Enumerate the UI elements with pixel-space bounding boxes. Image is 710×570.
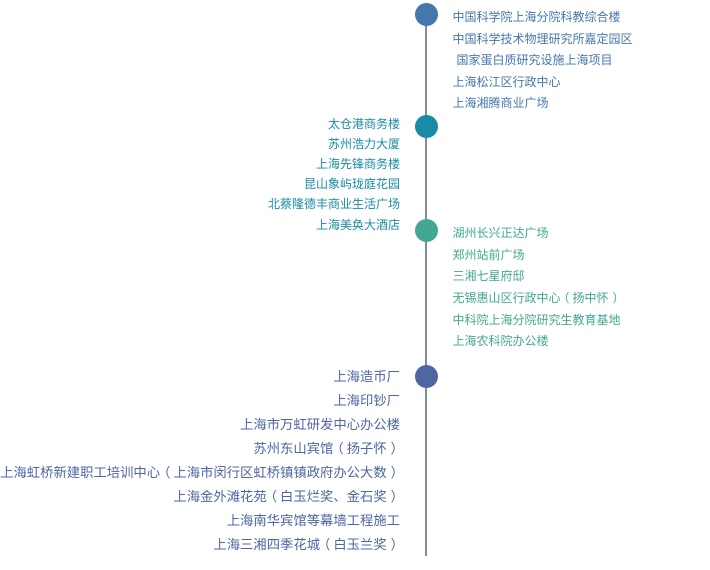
text group: indigo project list: 上海造币厂 xyxy=(333,369,400,384)
node: indigo xyxy=(415,365,438,388)
text group: indigo project list: 上海南华宾馆等幕墙工程施工 xyxy=(227,513,400,528)
text group: green project list: 中科院上海分院研究生教育基地 xyxy=(452,313,621,327)
text group: blue project list: 中国科学院上海分院科教综合楼 xyxy=(452,10,621,24)
text group: teal project list: 北蔡隆德丰商业生活广场 xyxy=(268,197,400,211)
text group: teal project list xyxy=(268,117,400,232)
node: teal xyxy=(415,115,438,138)
text group: teal project list: 昆山象屿珑庭花园 xyxy=(304,177,400,191)
text group: blue project list: 中国科学技术物理研究所嘉定园区 xyxy=(452,32,633,46)
text group: teal project list: 上海先锋商务楼 xyxy=(316,157,400,171)
text group: blue project list: 上海湘腾商业广场 xyxy=(452,96,549,110)
text group: green project list: 三湘七星府邸 xyxy=(452,269,525,283)
text group: indigo project list xyxy=(0,369,404,552)
text group: indigo project list: 上海金外滩花苑（白玉烂奖、金石奖 ） xyxy=(173,489,404,504)
timeline axis xyxy=(425,15,427,556)
text group: blue project list: 国家蛋白质研究设施上海项目 xyxy=(456,53,613,67)
text group: teal project list: 上海美奂大酒店 xyxy=(316,218,400,232)
text group: indigo project list: 上海虹桥新建职工培训中心（上海市闵行区虹桥镇镇政府办公大数 ） xyxy=(0,465,404,480)
text group: teal project list: 苏州浩力大厦 xyxy=(328,137,400,151)
text group: green project list: 湖州长兴正达广场 xyxy=(452,226,549,240)
text group: indigo project list: 苏州东山宾馆（扬子怀 ） xyxy=(253,441,404,456)
text group: blue project list: 上海松江区行政中心 xyxy=(452,75,561,89)
text group: teal project list: 太仓港商务楼 xyxy=(328,117,400,131)
node: green xyxy=(415,219,438,242)
text group: green project list: 上海农科院办公楼 xyxy=(452,334,549,348)
node: top blue xyxy=(415,3,438,26)
text group: indigo project list: 上海三湘四季花城（白玉兰奖 ） xyxy=(213,537,404,552)
text group: green project list xyxy=(452,226,625,348)
text group: indigo project list: 上海市万虹研发中心办公楼 xyxy=(240,417,400,432)
text group: green project list: 郑州站前广场 xyxy=(452,248,525,262)
text group: green project list: 无锡惠山区行政中心（扬中怀 ） xyxy=(452,291,625,305)
text group: indigo project list: 上海印钞厂 xyxy=(333,393,400,408)
text group: blue project list xyxy=(452,10,633,110)
